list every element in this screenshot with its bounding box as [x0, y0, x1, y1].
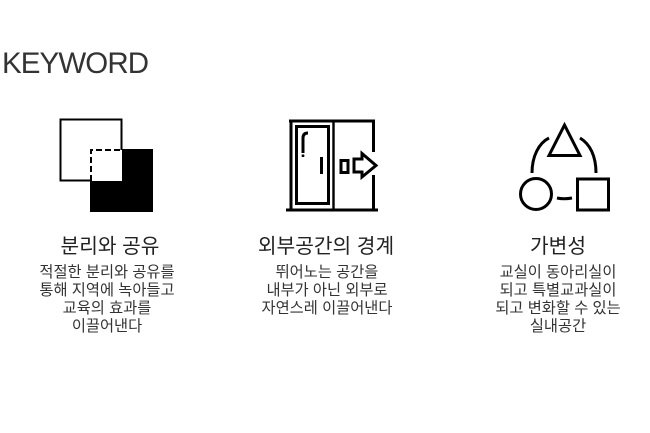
text: variability description: 되고 변화할 수 있는	[495, 300, 621, 317]
text: boundary description: 내부가 아닌 외부로	[266, 282, 388, 299]
text: boundary description: 자연스레 이끌어낸다	[262, 300, 392, 317]
icon: sliding door with arrow	[286, 120, 378, 212]
text: separation and sharing description: 이끌어낸다	[72, 318, 142, 335]
text: variability description: 실내공간	[530, 318, 586, 335]
icon: overlapping squares	[60, 118, 153, 212]
text: separation and sharing description: 교육의 효과를	[63, 300, 151, 317]
text: boundary description	[262, 264, 392, 317]
heading: boundary of outer space: 외부공간의 경계	[258, 236, 394, 258]
text: variability description: 되고 특별교과실이	[500, 282, 616, 299]
title: KEYWORD	[2, 47, 148, 80]
panel: variability	[495, 122, 621, 335]
panel: boundary of outer space	[258, 120, 394, 317]
text: variability description	[495, 264, 621, 335]
icon: triangle circle square cycle	[519, 122, 610, 212]
heading: variability: 가변성	[530, 236, 586, 258]
panel: separation and sharing	[39, 118, 175, 335]
text: boundary description: 뛰어노는 공간을	[276, 264, 378, 281]
heading: separation and sharing: 분리와 공유	[61, 236, 159, 258]
text: separation and sharing description: 통해 지역에 녹아들고	[39, 282, 175, 299]
text: variability description: 교실이 동아리실이	[500, 264, 616, 281]
text: separation and sharing description: 적절한 분리와 공유를	[39, 264, 175, 281]
text: separation and sharing description	[39, 264, 175, 335]
